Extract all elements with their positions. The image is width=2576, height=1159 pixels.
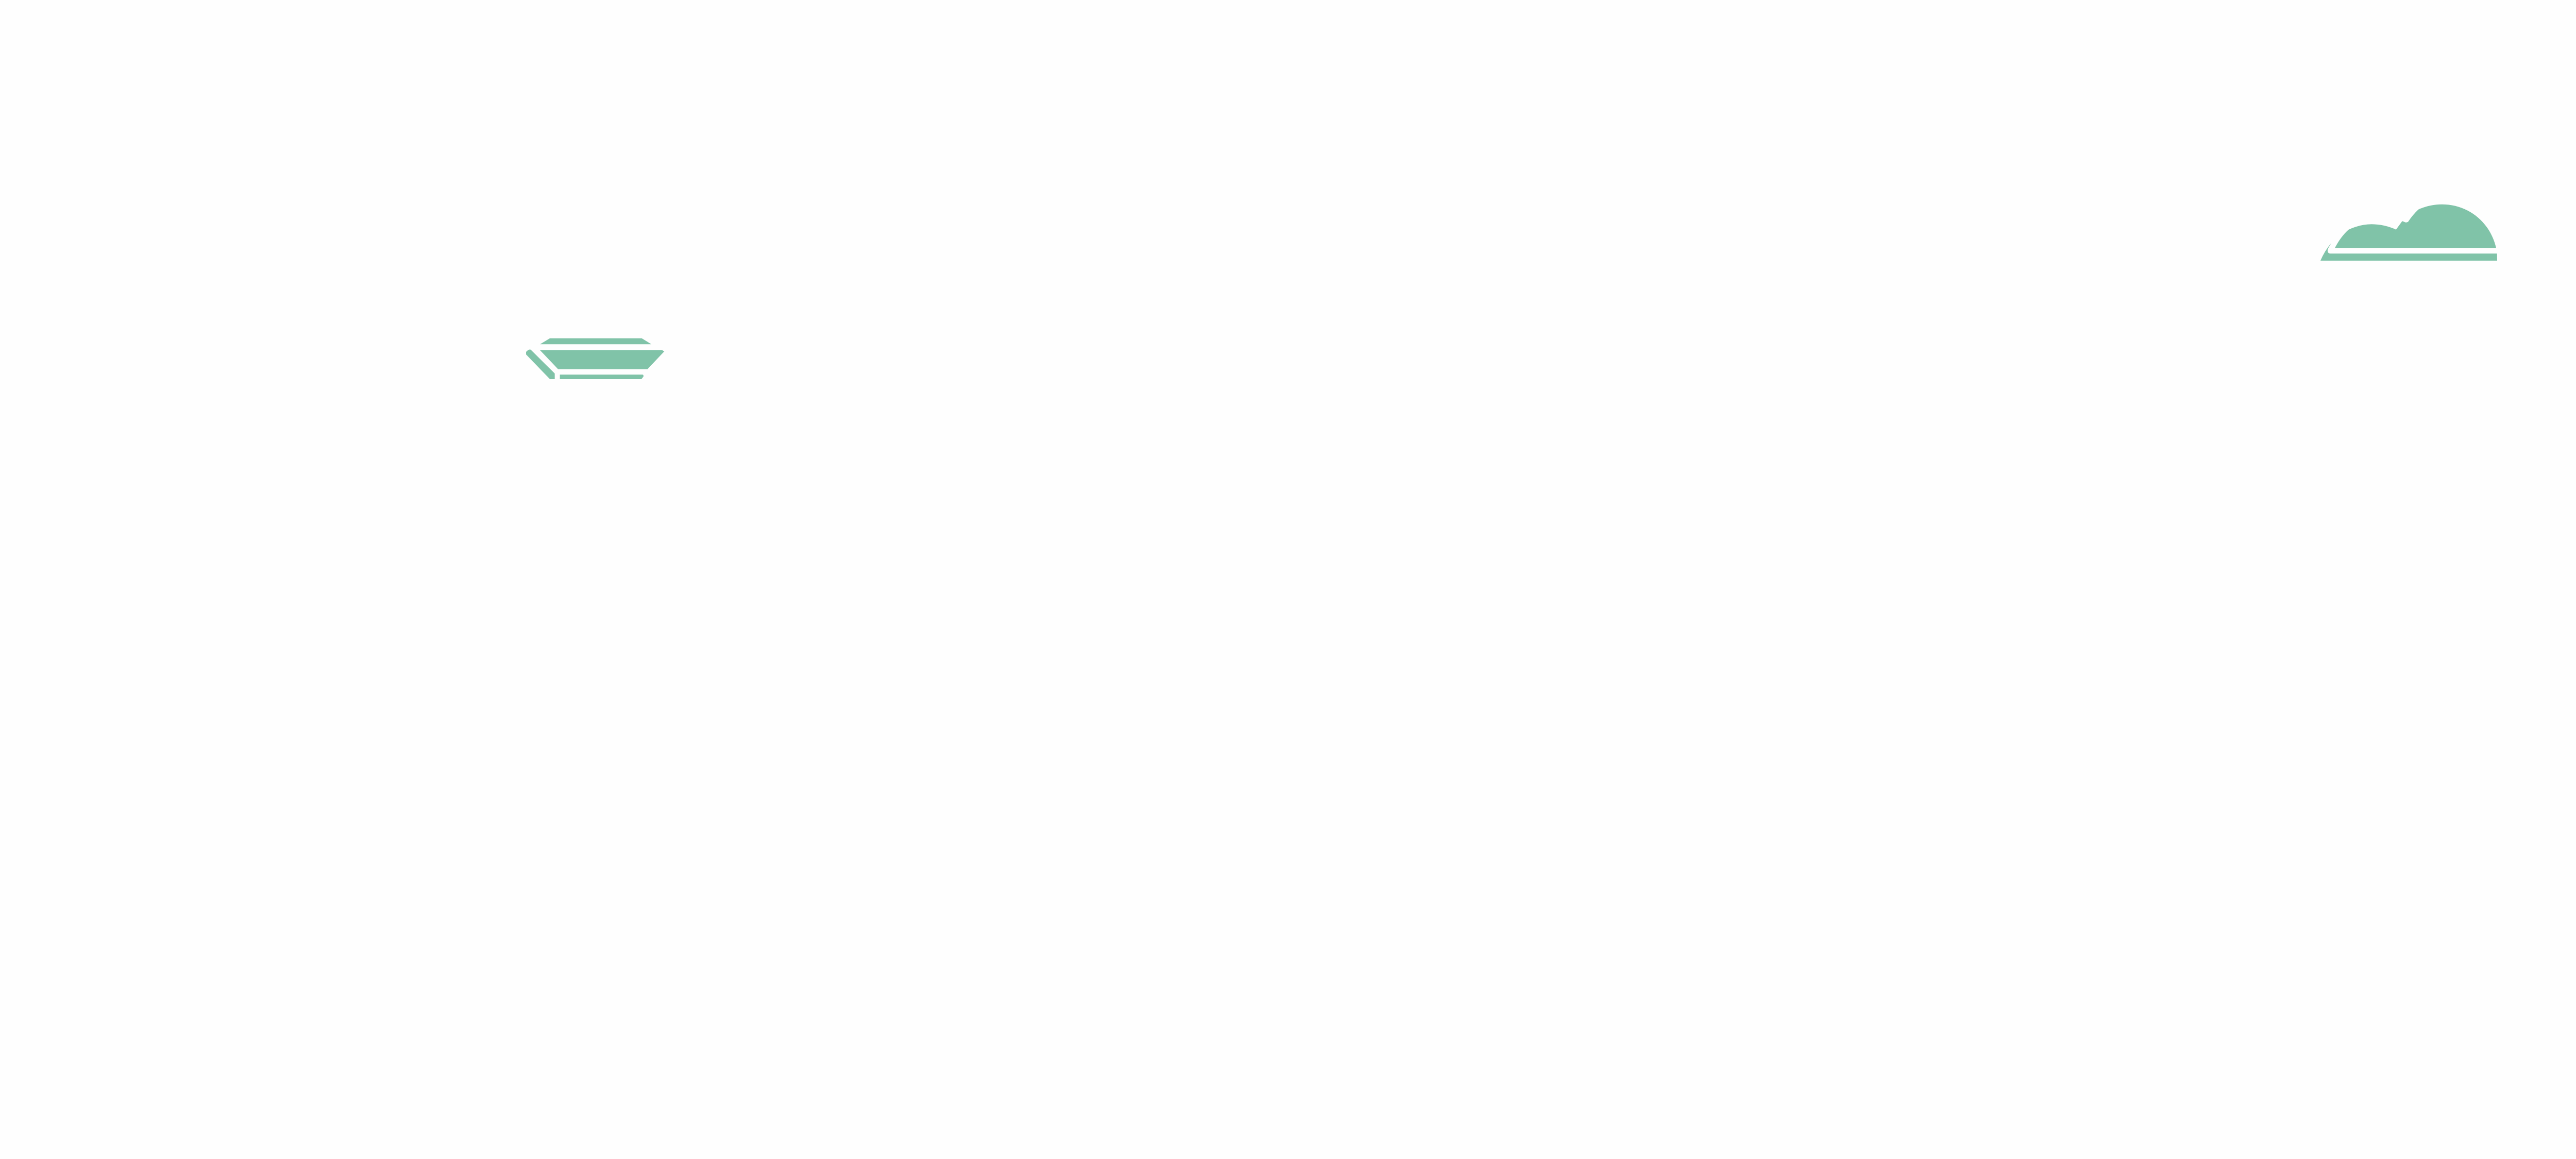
icon: green angular bowl [526,338,664,379]
icon: green cloud-shaped mound [2320,204,2497,261]
